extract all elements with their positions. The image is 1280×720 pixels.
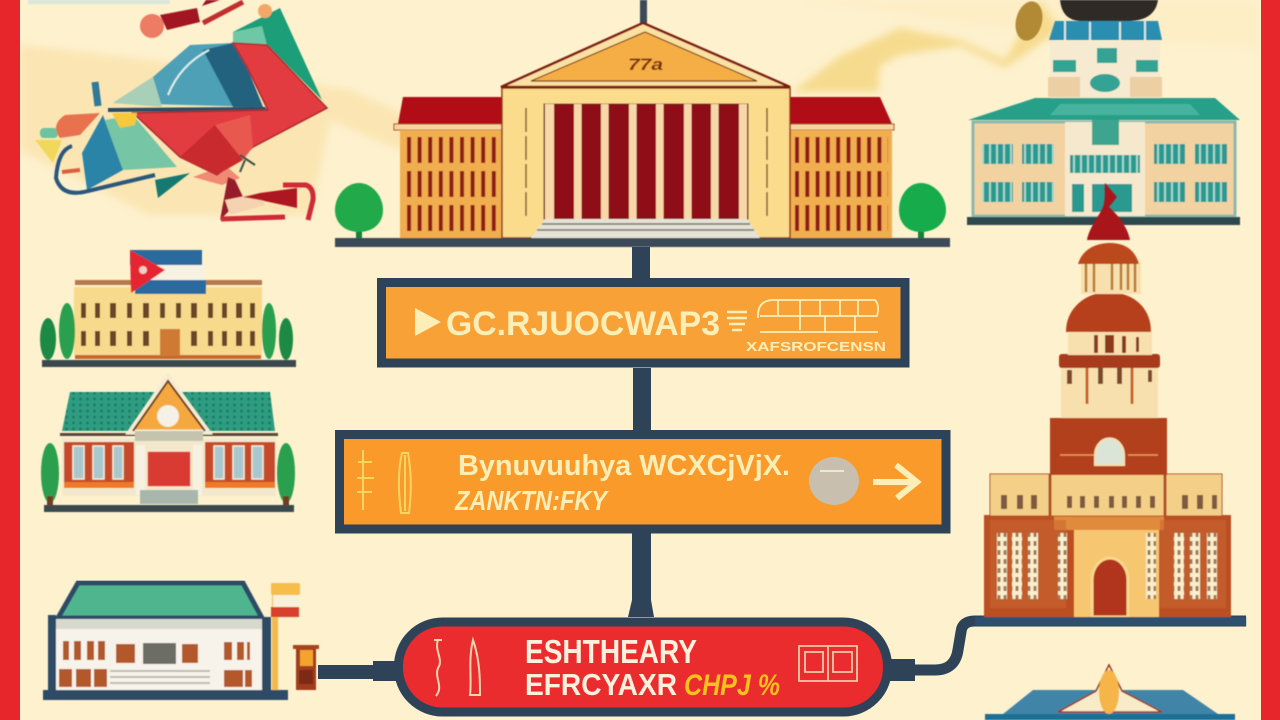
icon: teal-roofed hall <box>967 0 1240 225</box>
icon: main university building <box>335 0 950 247</box>
cap <box>1087 183 1130 240</box>
body <box>973 122 1235 216</box>
platform <box>975 617 1246 626</box>
scribbled label <box>746 300 886 354</box>
title text: ESHTHEARY <box>525 633 697 670</box>
connector 1 <box>632 247 650 279</box>
right wing <box>790 97 894 238</box>
lantern roof <box>1078 243 1139 264</box>
icon: domed tower <box>975 183 1246 626</box>
trees <box>41 443 295 506</box>
trees <box>40 303 293 360</box>
flag <box>130 250 206 294</box>
coin <box>1012 0 1046 44</box>
flag <box>271 583 300 617</box>
icon: arrow <box>873 465 917 498</box>
steps <box>531 219 760 238</box>
scribbled label: XAFSROFCENSN <box>746 339 886 354</box>
connector 2 <box>633 368 651 431</box>
panel: orange box 2 <box>340 434 946 529</box>
platform <box>43 690 288 700</box>
door <box>160 329 180 356</box>
right connector pipe <box>890 621 1246 681</box>
colonnade <box>544 104 748 219</box>
small lines icon <box>727 312 747 330</box>
panel: orange box 1 <box>382 282 905 363</box>
icon: play triangle <box>415 308 441 336</box>
connector 3 <box>628 533 654 617</box>
central block <box>502 88 790 238</box>
icon: glyph column <box>357 450 411 513</box>
icon: open book <box>799 646 857 681</box>
top connector <box>640 0 647 24</box>
base <box>984 515 1231 617</box>
side border left <box>0 0 20 720</box>
flag pole <box>272 585 278 690</box>
middle tier <box>990 474 1222 516</box>
body text: Bynuvuuhya WCXCjVjX. <box>458 450 790 482</box>
panel: red pill <box>398 622 888 712</box>
icon: building with flag <box>40 250 296 367</box>
platform <box>42 360 296 367</box>
body text <box>454 450 790 516</box>
title text: EFRCYAXR <box>525 667 677 702</box>
drum <box>1061 365 1158 418</box>
windows <box>982 144 1227 202</box>
background haze <box>20 0 1260 215</box>
pediment text: 77a <box>628 55 663 74</box>
left connector joint <box>318 661 397 681</box>
icon: school with green roof <box>41 377 295 512</box>
icon: glyph column <box>434 640 480 696</box>
icon: coin <box>809 457 859 505</box>
platform <box>967 217 1240 225</box>
body text: ZANKTN:FKY <box>454 485 609 516</box>
pediment <box>501 23 790 87</box>
title text <box>525 633 697 702</box>
gable <box>130 377 208 432</box>
balcony <box>1059 354 1160 368</box>
door <box>147 451 191 487</box>
heading text: GC.RJUOCWAP3 <box>446 305 720 343</box>
main dome <box>1066 292 1151 332</box>
icon: lantern post <box>293 645 319 690</box>
icon: cropped blue roof <box>985 665 1235 720</box>
platform <box>335 238 950 247</box>
roof <box>968 98 1240 120</box>
lantern <box>1081 262 1141 294</box>
side border right <box>1261 0 1280 720</box>
upper drum <box>1068 328 1152 355</box>
clock block <box>1050 418 1167 475</box>
tree left <box>335 183 383 238</box>
icon: backpack illustration <box>28 0 327 220</box>
left wing <box>394 97 504 238</box>
accent text: CHPJ % <box>684 669 780 702</box>
tree right <box>899 183 946 238</box>
icon: low white building <box>43 583 300 700</box>
platform <box>44 505 294 512</box>
